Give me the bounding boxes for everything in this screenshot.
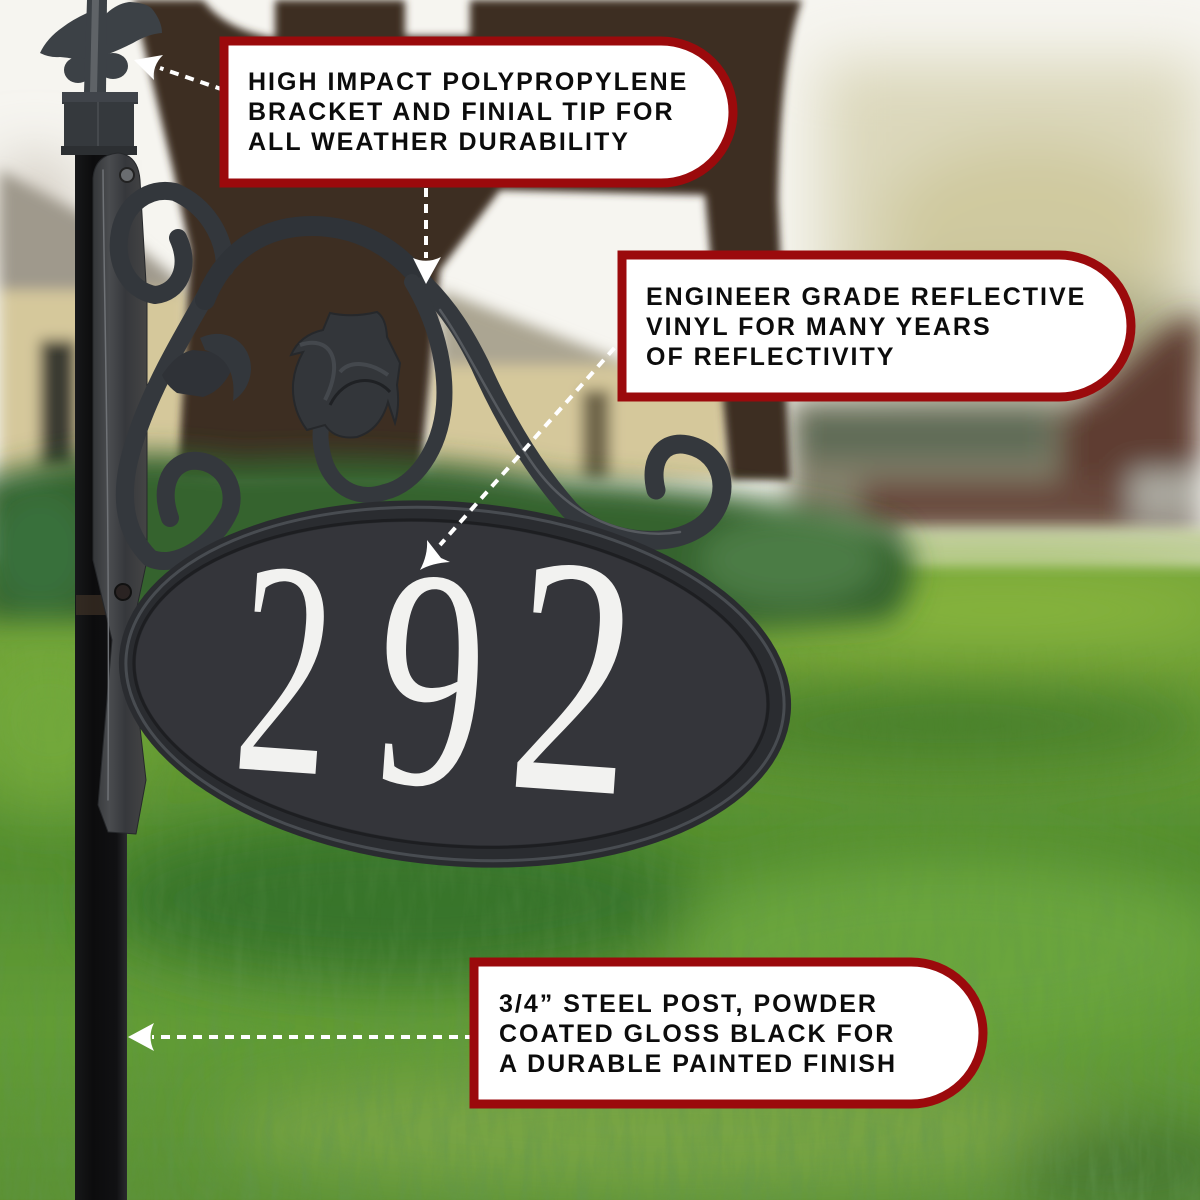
callout 3: steel post: 3/4” STEEL POST, POWDER	[499, 990, 878, 1018]
callout 1: polypropylene bracket	[224, 41, 733, 183]
house number 292: 2	[500, 485, 648, 869]
hedge	[0, 453, 913, 630]
arrow: callout 2 to reflective vinyl	[420, 336, 625, 570]
house	[0, 170, 730, 480]
house number 292: 9	[365, 503, 498, 856]
oval number plate	[103, 473, 807, 895]
arrow: callout 1 to finial	[134, 55, 224, 90]
callout 3: steel post	[474, 962, 983, 1104]
lawn	[0, 560, 1200, 1200]
callout 2: reflective vinyl: ENGINEER GRADE REFLECTIVE	[646, 283, 1086, 311]
tree trunk	[133, 0, 802, 480]
main arch top	[205, 226, 435, 300]
callout 3: steel post: COATED GLOSS BLACK FOR	[499, 1020, 895, 1048]
main arch right with end curl	[425, 285, 722, 540]
main arch left and lower scroll	[125, 270, 232, 561]
callout 1: polypropylene bracket: ALL WEATHER DURABILITY	[248, 128, 630, 156]
callout 1: polypropylene bracket: HIGH IMPACT POLYPROPYLENE	[248, 68, 688, 96]
house number 292: 2	[226, 497, 345, 842]
callout 1: polypropylene bracket: BRACKET AND FINIAL TIP FOR	[248, 98, 675, 126]
house number 292	[226, 485, 648, 869]
brick house right	[790, 315, 1200, 535]
arrow: callout 1 to arch	[413, 188, 441, 284]
callout 2: reflective vinyl: OF REFLECTIVITY	[646, 343, 895, 371]
icon: leaf	[162, 334, 251, 401]
callout 2: reflective vinyl: VINYL FOR MANY YEARS	[646, 313, 992, 341]
steel post	[75, 150, 127, 1200]
top scroll	[119, 191, 225, 295]
inner loop with rose stem	[320, 282, 444, 495]
callout 2: reflective vinyl	[622, 255, 1131, 397]
bolt: top	[120, 168, 134, 182]
finial tip	[40, 0, 162, 92]
icon: rose bud	[291, 312, 400, 438]
arrow: callout 3 to steel post	[128, 1023, 474, 1051]
bolt: bottom	[115, 584, 131, 600]
bracket cap	[61, 92, 138, 155]
bracket arm with scrolls	[93, 153, 722, 834]
callout 3: steel post: A DURABLE PAINTED FINISH	[499, 1050, 897, 1078]
